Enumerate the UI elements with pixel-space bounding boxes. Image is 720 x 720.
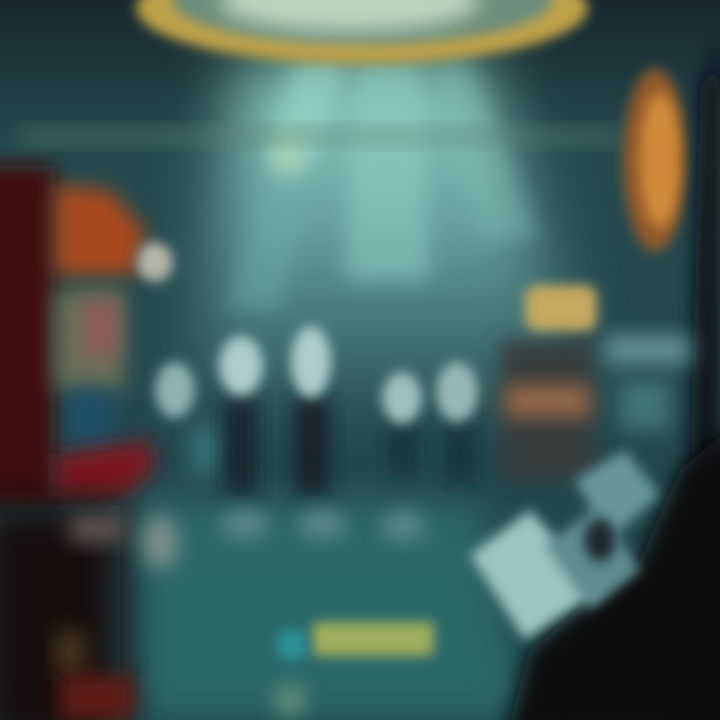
right orange lantern [623, 68, 687, 252]
right dark edge [685, 40, 720, 720]
figure 3 [291, 326, 331, 495]
figure 4 [382, 372, 422, 475]
bottom left dark [0, 505, 120, 720]
light beam glow [190, 60, 590, 400]
top yellow ring [136, 0, 588, 64]
left red machine [0, 165, 173, 505]
bottom right black corner [505, 420, 720, 720]
figure 1 [155, 362, 220, 475]
figure 5 [436, 362, 478, 485]
lower floor [135, 500, 530, 720]
floor reflections [221, 510, 425, 540]
bottom small dot [274, 684, 306, 716]
horizontal ledge band [20, 128, 620, 144]
figure 2 [219, 336, 263, 495]
figures [155, 326, 478, 495]
right yellow sign and brown machine [500, 285, 597, 480]
pale tilted cards [470, 450, 660, 640]
right pale blue stack [605, 335, 690, 430]
yellow-green label bar [312, 622, 434, 656]
teal dot [276, 629, 308, 661]
bottom left reflections [55, 514, 178, 720]
